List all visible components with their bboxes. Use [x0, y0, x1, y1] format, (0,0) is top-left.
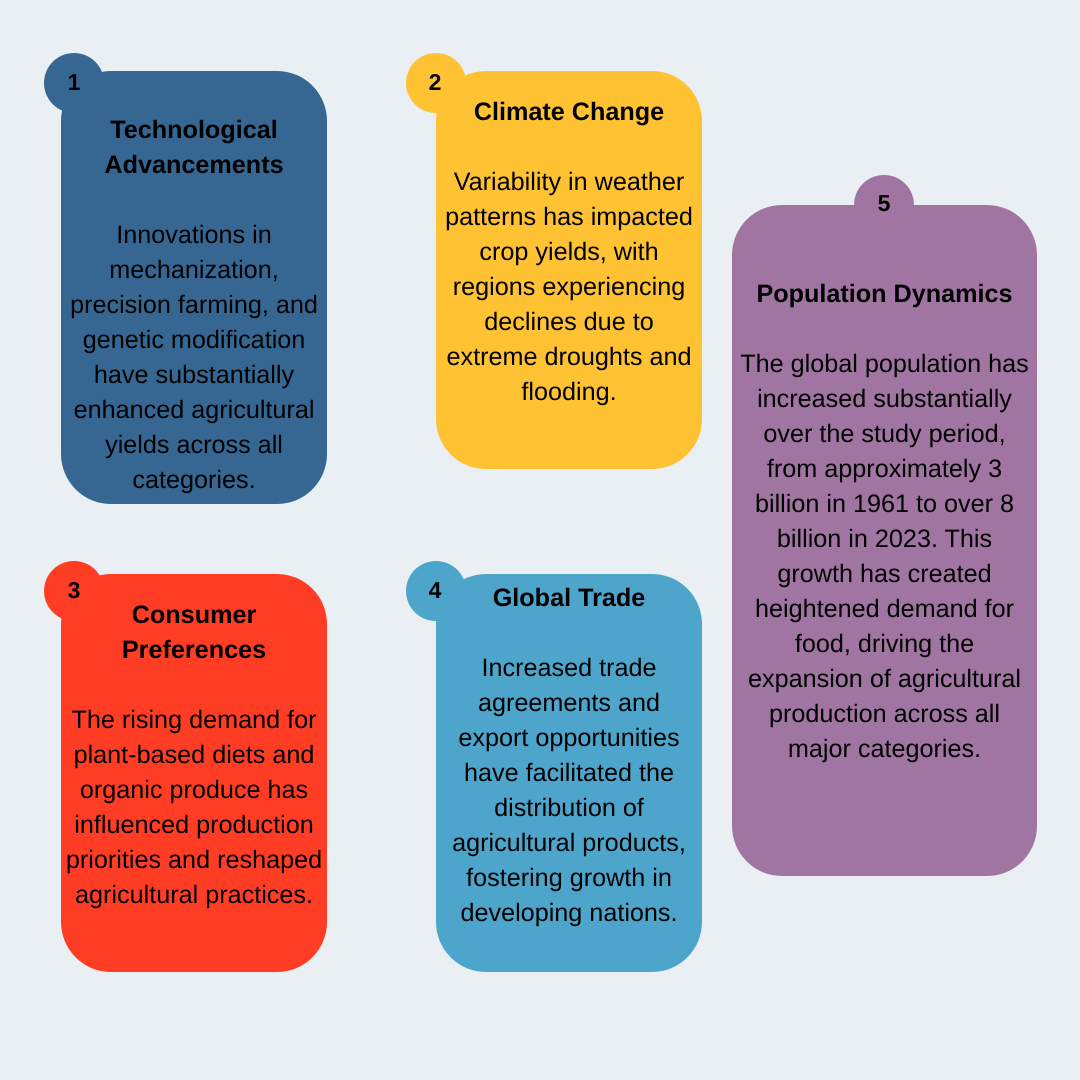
body text: The rising demand for [71, 706, 316, 734]
body text: extreme droughts and [446, 343, 692, 371]
body text: precision farming, and [70, 291, 318, 319]
number 3: 3 [68, 577, 80, 603]
body text: Increased trade [481, 654, 657, 682]
body text: developing nations. [460, 899, 678, 927]
body text: patterns has impacted [445, 203, 693, 231]
body text: billion in 2023. This [777, 525, 992, 553]
body text: Variability in weather [454, 168, 684, 196]
body text: fostering growth in [466, 864, 672, 892]
body text: priorities and reshaped [66, 846, 322, 874]
badge 1 circle [44, 53, 104, 113]
body text: yields across all [105, 431, 283, 459]
badge 2 circle [406, 53, 466, 113]
body text: food, driving the [795, 630, 974, 658]
number 1: 1 [68, 69, 80, 95]
panel: consumer preferences [44, 561, 327, 972]
body text [66, 706, 322, 909]
body text: enhanced agricultural [74, 396, 314, 424]
body text [452, 654, 686, 927]
heading: Climate Change [474, 98, 664, 126]
heading [104, 116, 284, 179]
panel: climate change [406, 53, 702, 469]
panel: technological advancements [44, 53, 327, 504]
body text: crop yields, with [479, 238, 659, 266]
number 4: 4 [429, 577, 441, 603]
body text: agreements and [478, 689, 660, 717]
body text: growth has created [777, 560, 992, 588]
body text: over the study period, [763, 420, 1006, 448]
body text: Innovations in [116, 221, 272, 249]
body text: distribution of [494, 794, 644, 822]
body text: have substantially [94, 361, 294, 389]
number 2: 2 [429, 69, 441, 95]
badge 5 circle [854, 175, 914, 235]
number 5: 5 [878, 190, 890, 216]
body text: categories. [132, 466, 256, 494]
body text: declines due to [484, 308, 654, 336]
badge 4 circle [406, 561, 466, 621]
heading: Population Dynamics [756, 280, 1013, 308]
body text: regions experiencing [453, 273, 685, 301]
card background [732, 205, 1037, 876]
card background [436, 71, 702, 469]
body text [445, 168, 693, 406]
body text: genetic modification [83, 326, 305, 354]
card background [436, 574, 702, 972]
body text: mechanization, [109, 256, 279, 284]
badge 3 circle [44, 561, 104, 621]
body text: influenced production [74, 811, 314, 839]
body text: production across all [769, 700, 1000, 728]
heading: Preferences [122, 636, 266, 664]
heading [122, 601, 266, 664]
body text: export opportunities [458, 724, 680, 752]
body text: plant-based diets and [74, 741, 314, 769]
body text: have facilitated the [464, 759, 674, 787]
body text: flooding. [521, 378, 617, 406]
body text: billion in 1961 to over 8 [755, 490, 1014, 518]
panel: population dynamics [732, 175, 1037, 876]
body text: expansion of agricultural [748, 665, 1021, 693]
body text [740, 350, 1029, 763]
body text: agricultural products, [452, 829, 686, 857]
body text: The global population has [740, 350, 1029, 378]
heading: Consumer [132, 601, 256, 629]
heading: Technological [110, 116, 278, 144]
heading: Advancements [104, 151, 284, 179]
card background [61, 574, 327, 972]
body text: from approximately 3 [767, 455, 1002, 483]
body text: organic produce has [80, 776, 308, 804]
body text [70, 221, 318, 494]
heading: Global Trade [493, 584, 645, 612]
body text: increased substantially [757, 385, 1012, 413]
body text: agricultural practices. [75, 881, 313, 909]
body text: major categories. [788, 735, 981, 763]
card background [61, 71, 327, 504]
body text: heightened demand for [755, 595, 1014, 623]
panel: global trade [406, 561, 702, 972]
